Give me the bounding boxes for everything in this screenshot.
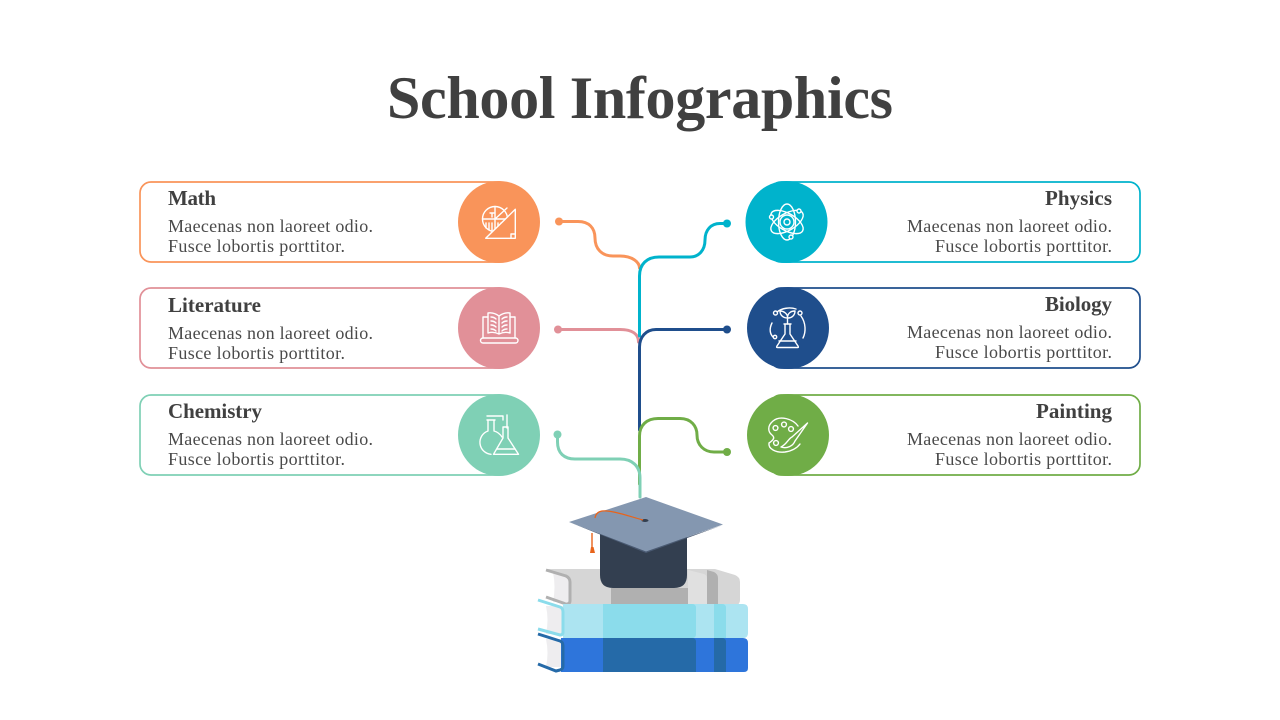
icon: book on laptop [480,313,518,343]
badge: Math [458,181,540,263]
heading: Physics: Physics [1045,186,1112,210]
panel: Chemistry [140,394,540,476]
description: Chemistry: Maecenas non laoreet odio. [168,429,373,449]
description: Literature: Fusce lobortis porttitor. [168,343,345,363]
icon: atom [767,204,807,240]
description: Physics: Maecenas non laoreet odio. [907,216,1112,236]
description: Literature: Maecenas non laoreet odio. [168,323,373,343]
description: Painting: Fusce lobortis porttitor. [935,449,1112,469]
badge: Physics [746,181,828,263]
illustration: stack of books with graduation cap [538,497,748,672]
heading: Literature: Literature [168,293,261,317]
description: Biology: Maecenas non laoreet odio. [907,322,1112,342]
description: Math: Fusce lobortis porttitor. [168,236,345,256]
description: Painting: Maecenas non laoreet odio. [907,429,1112,449]
icon: geometry [482,206,515,238]
heading: Chemistry: Chemistry [168,399,262,423]
book: light blue [538,600,748,638]
title: School Infographics [387,65,893,131]
book: blue [538,634,748,672]
connector: math [555,218,640,268]
badge: Literature [458,287,540,369]
connector: physics [640,220,731,336]
description: Physics [907,216,1112,256]
icon: flasks [480,415,518,454]
panel: Painting [747,394,1140,476]
connector: biology [640,326,731,430]
badge: Chemistry [458,394,540,476]
heading: Painting: Painting [1036,399,1112,423]
heading: Math: Math [168,186,216,210]
icon: plant in flask [770,308,805,348]
description: Math: Maecenas non laoreet odio. [168,216,373,236]
heading: Biology: Biology [1045,292,1112,316]
badge: Biology [747,287,829,369]
connector: chemistry [554,430,640,497]
badge: Painting [747,394,829,476]
description: Chemistry: Fusce lobortis porttitor. [168,449,345,469]
description: Chemistry [168,429,373,469]
description: Physics: Fusce lobortis porttitor. [935,236,1112,256]
description: Biology [907,322,1112,362]
description: Painting [907,429,1112,469]
connector: painting [640,418,731,484]
panel: Math [140,181,540,263]
description: Literature [168,323,373,363]
connector tree [554,218,731,497]
panel: Biology [747,287,1140,369]
description: Math [168,216,373,256]
panel: Physics [746,181,1140,263]
book: gray [546,569,740,605]
icon: palette and brush [769,418,808,452]
panel: Literature [140,287,540,369]
icon: graduation cap [569,497,723,588]
description: Biology: Fusce lobortis porttitor. [935,342,1112,362]
connector: literature [554,326,638,342]
